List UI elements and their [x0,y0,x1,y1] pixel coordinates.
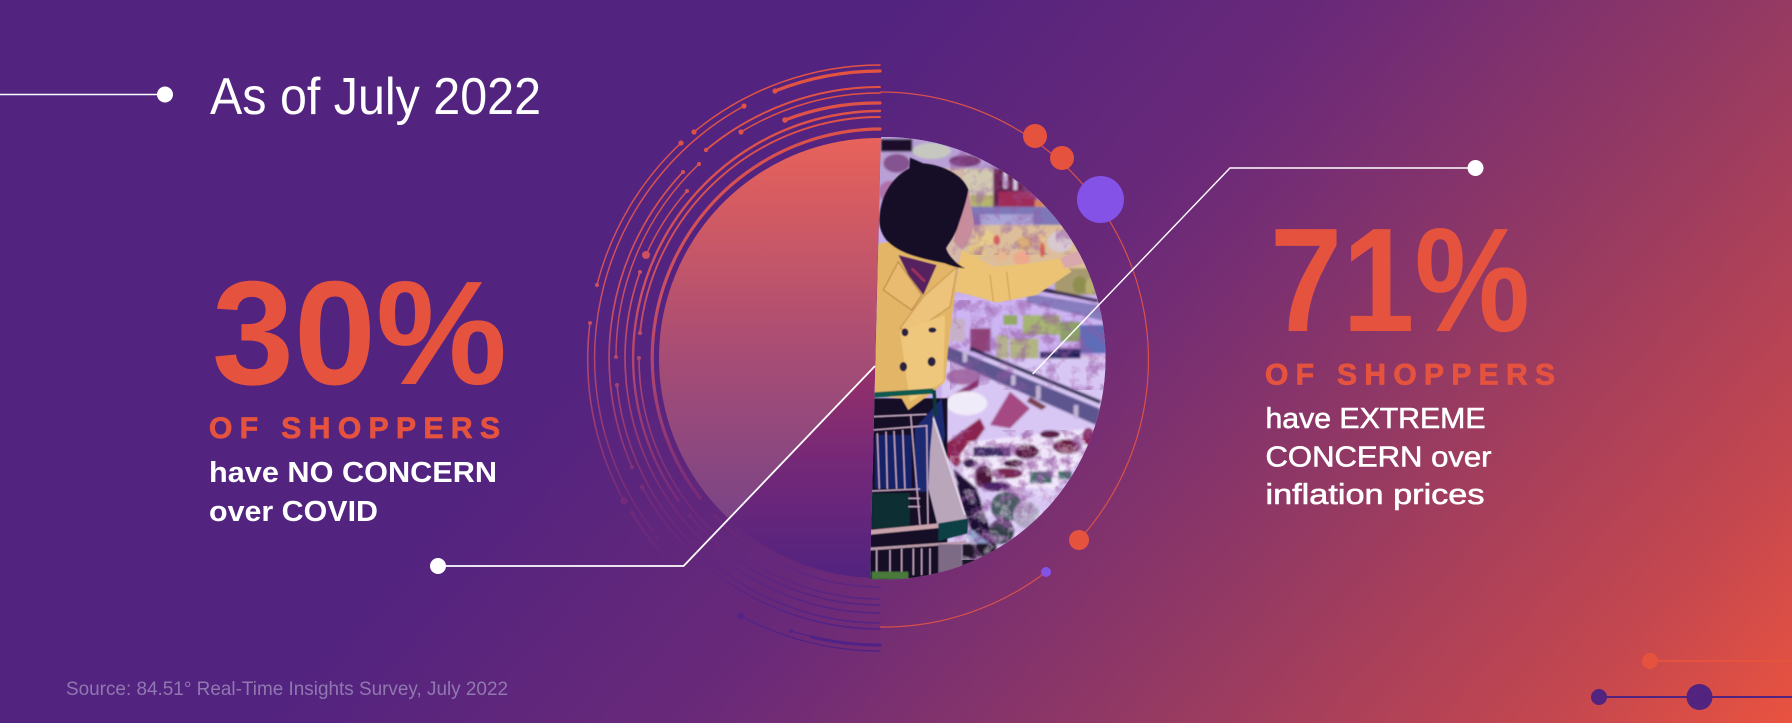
stat block: 71 percent extreme concern over inflation [1265,198,1555,511]
bottom-right decorative coral node line [1642,653,1792,669]
date marker line and dot [0,86,173,102]
description line 1: have EXTREME [1266,403,1486,435]
photo: shelves and produce [877,138,1108,567]
description line 2: CONCERN over [1266,442,1492,474]
photo: shopper and cart [870,158,1083,580]
bottom-right decorative purple node line [1591,684,1792,710]
right orbit arcs [880,92,1148,627]
stat number: 71%: 71% [1270,198,1530,363]
stat block: 30 percent no concern over COVID [209,251,507,528]
left decorative concentric rings [588,65,880,651]
stat number: 30%: 30% [212,251,507,416]
orbit dot: large violet [1077,176,1124,223]
orbit dot: small violet [1041,567,1051,577]
connector line: 30% callout to pie [438,366,875,566]
stat label: of shoppers: OF SHOPPERS [209,412,500,445]
pie segment: lower purple sector [728,366,880,578]
pie segment: upper coral sector [659,138,881,518]
orbit dot: coral top [1023,124,1047,148]
description line 3: inflation prices [1266,479,1484,511]
photo: produce texture [950,140,1110,560]
orbit dot: coral second [1050,146,1074,170]
heading: date: As of July 2022 [210,68,541,126]
connector line: 71% callout to photo [1033,168,1475,374]
description line 1: have NO CONCERN [209,457,497,489]
description line 2: over COVID [209,496,378,528]
orbit dot: coral lower [1069,530,1089,550]
connector dot: 30% [430,558,446,574]
photo: shopper in grocery aisle with cart [870,137,1106,580]
connector dot: 71% [1468,160,1484,176]
stat label: of shoppers: OF SHOPPERS [1265,358,1555,392]
source note: Source: 84.51° Real-Time Insights Survey, July 2022 [66,678,508,700]
